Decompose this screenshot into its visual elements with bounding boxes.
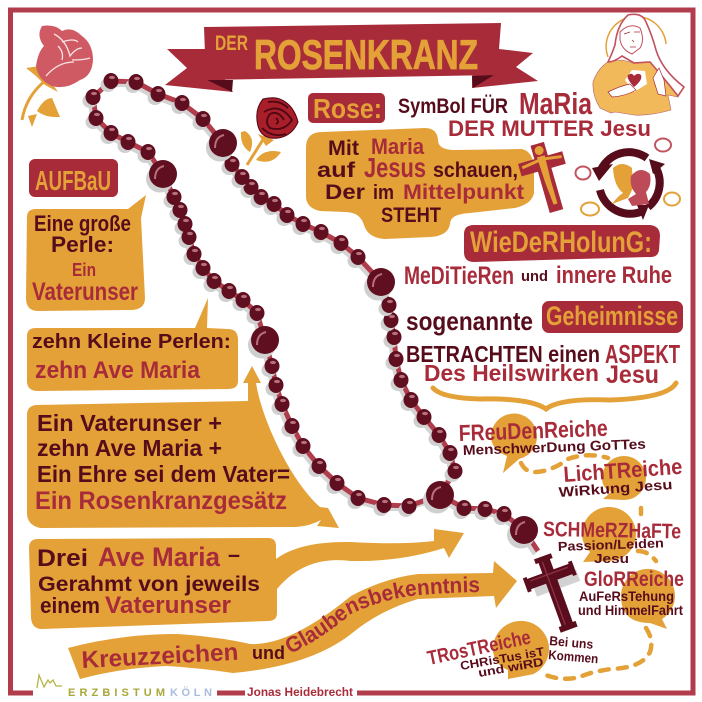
mystery: Trostreiche: CHRisTus isT <box>459 644 546 673</box>
text: Symbol für Maria: SymBol FÜR <box>398 95 508 118</box>
heading: Aufbau <box>29 159 118 197</box>
panel: mit Maria auf Jesus schauen: Jesus <box>364 152 426 183</box>
callout: eine große Perle: Vaterunser <box>32 278 138 306</box>
logo: Erzbistum Köln: KÖLN <box>170 686 212 699</box>
mystery: Freudenreiche: FReuDenReiche <box>458 415 608 446</box>
mystery: Freudenreiche: MenschwerDung GoTTes <box>463 436 646 458</box>
panel: mit Maria auf Jesus schauen: auf <box>317 159 356 182</box>
icon: pink rose <box>22 26 93 127</box>
dashed connector <box>521 455 656 679</box>
mystery: Schmerzhafte: Passion/Leiden <box>558 535 664 554</box>
logo: Erzbistum Köln: ERZBISTUM <box>68 687 165 699</box>
arrow block: drei Ave Maria: Gerahmt von jeweils <box>38 573 260 596</box>
callout: zehn kleine Perlen <box>27 298 238 391</box>
arrow block: drei Ave Maria: – <box>228 542 240 567</box>
arrow block: Rosenkranzgesätz: zehn Ave Maria + <box>37 435 222 461</box>
mystery: Lichtreiche: LichTReiche <box>563 454 683 487</box>
mystery: Trostreiche: Kommen <box>548 647 599 666</box>
mystery: Glorreiche: AuFeRsTehung <box>579 588 674 604</box>
text: sogenannte Geheimnisse: BETRACHTEN einen <box>406 341 600 367</box>
panel: mit Maria auf Jesus schauen: Maria <box>371 134 425 159</box>
title banner <box>165 23 538 92</box>
arrow block: Rosenkranzgesätz: Ein Rosenkranzgesätz <box>35 487 287 515</box>
panel: mit Maria auf Jesus schauen <box>306 128 534 239</box>
icon: crucifix <box>514 138 578 218</box>
mystery: Lichtreiche <box>558 454 683 500</box>
mystery: Glorreiche <box>578 568 684 629</box>
text: sogenannte Geheimnisse: sogenannte <box>406 306 533 336</box>
arrow block: drei Ave Maria <box>29 529 464 629</box>
callout: zehn kleine Perlen: zehn Ave Maria <box>35 357 201 384</box>
credit: Jonas Heidebrecht: Jonas Heidebrecht <box>247 685 353 699</box>
mystery: Glorreiche: und HimmelFahrt <box>578 602 683 618</box>
arrow block: drei Ave Maria: Vaterunser <box>105 592 231 619</box>
icon: repetition cycle <box>592 152 665 220</box>
text: Meditieren und innere Ruhe: innere Ruhe <box>556 262 672 289</box>
callout: eine große Perle: Ein <box>72 260 96 280</box>
mystery: Glorreiche: GloRReiche <box>584 568 684 591</box>
panel: mit Maria auf Jesus schauen: Mittelpunkt <box>403 181 524 204</box>
callout: eine große Perle <box>26 195 146 311</box>
mystery: Freudenreiche <box>458 414 646 473</box>
text: Symbol für Maria: DER MUTTER Jesu <box>448 116 651 141</box>
mystery: Trostreiche: TRosTReiche <box>425 627 533 670</box>
panel: mit Maria auf Jesus schauen: Der <box>325 181 365 204</box>
logo: Erzbistum Köln <box>37 675 212 699</box>
mystery: Schmerzhafte: Jesu <box>594 551 629 566</box>
panel: mit Maria auf Jesus schauen: schauen, <box>433 159 518 182</box>
heading: Wiederholung: WieDeRHolunG: <box>470 226 652 259</box>
text: Meditieren und innere Ruhe <box>404 262 672 290</box>
brace <box>433 383 676 409</box>
text: Meditieren und innere Ruhe: und <box>521 268 548 285</box>
arrow: Kreuzzeichen und Glaubensbekenntnis: Kreuzzeichen <box>81 639 239 674</box>
arrow block: drei Ave Maria: einem <box>40 593 100 618</box>
mystery: Trostreiche <box>425 621 599 680</box>
rosary beads chain <box>82 73 538 554</box>
arrow: Kreuzzeichen und Glaubensbekenntnis: und <box>252 643 285 663</box>
title banner: ROSENKRANZ <box>254 31 478 78</box>
arrow block: Rosenkranzgesätz <box>27 366 339 528</box>
arrow block: drei Ave Maria: Ave Maria <box>98 542 221 572</box>
panel: mit Maria auf Jesus schauen: im <box>373 182 394 204</box>
arrow: Kreuzzeichen und Glaubensbekenntnis: Glaubensbekenntnis <box>286 576 480 652</box>
callout: eine große Perle: Perle: <box>51 232 114 257</box>
text: sogenannte Geheimnisse <box>406 301 683 389</box>
mystery: Schmerzhafte <box>543 507 681 566</box>
panel: mit Maria auf Jesus schauen: Mit <box>328 137 359 160</box>
mystery: Lichtreiche: WiRkung Jesu <box>558 476 673 500</box>
arrow block: Rosenkranzgesätz: Ein Vaterunser + <box>37 410 222 436</box>
icon: rosary cross <box>518 547 595 639</box>
text: sogenannte Geheimnisse: Jesu <box>606 361 659 389</box>
title banner: DER <box>215 32 248 55</box>
heading: Aufbau: AUFBaU <box>35 165 111 196</box>
arrow block: drei Ave Maria: Drei <box>37 545 88 572</box>
icon: dark red rose <box>241 98 298 165</box>
icon: speech bubbles <box>576 138 680 216</box>
arrow: Kreuzzeichen und Glaubensbekenntnis <box>68 561 517 679</box>
arrow block: Rosenkranzgesätz: Ein Ehre sei dem Vater= <box>37 461 290 487</box>
text: Meditieren und innere Ruhe: MeDiTieRen <box>404 262 514 290</box>
heading: Rose: Rose: <box>313 93 382 124</box>
mystery: Trostreiche: Bei uns <box>549 633 594 652</box>
panel: mit Maria auf Jesus schauen: STEHT <box>381 204 441 227</box>
callout: zehn kleine Perlen: zehn Kleine Perlen: <box>32 331 231 353</box>
text: Symbol für Maria: MaRia <box>519 86 593 121</box>
icon: Mary <box>593 14 684 115</box>
text: sogenannte Geheimnisse: Des Heilswirken <box>424 360 599 386</box>
mystery: Trostreiche: und wiRD <box>477 655 545 680</box>
callout: eine große Perle: Eine große <box>34 211 131 236</box>
text: Symbol für Maria <box>398 86 651 141</box>
